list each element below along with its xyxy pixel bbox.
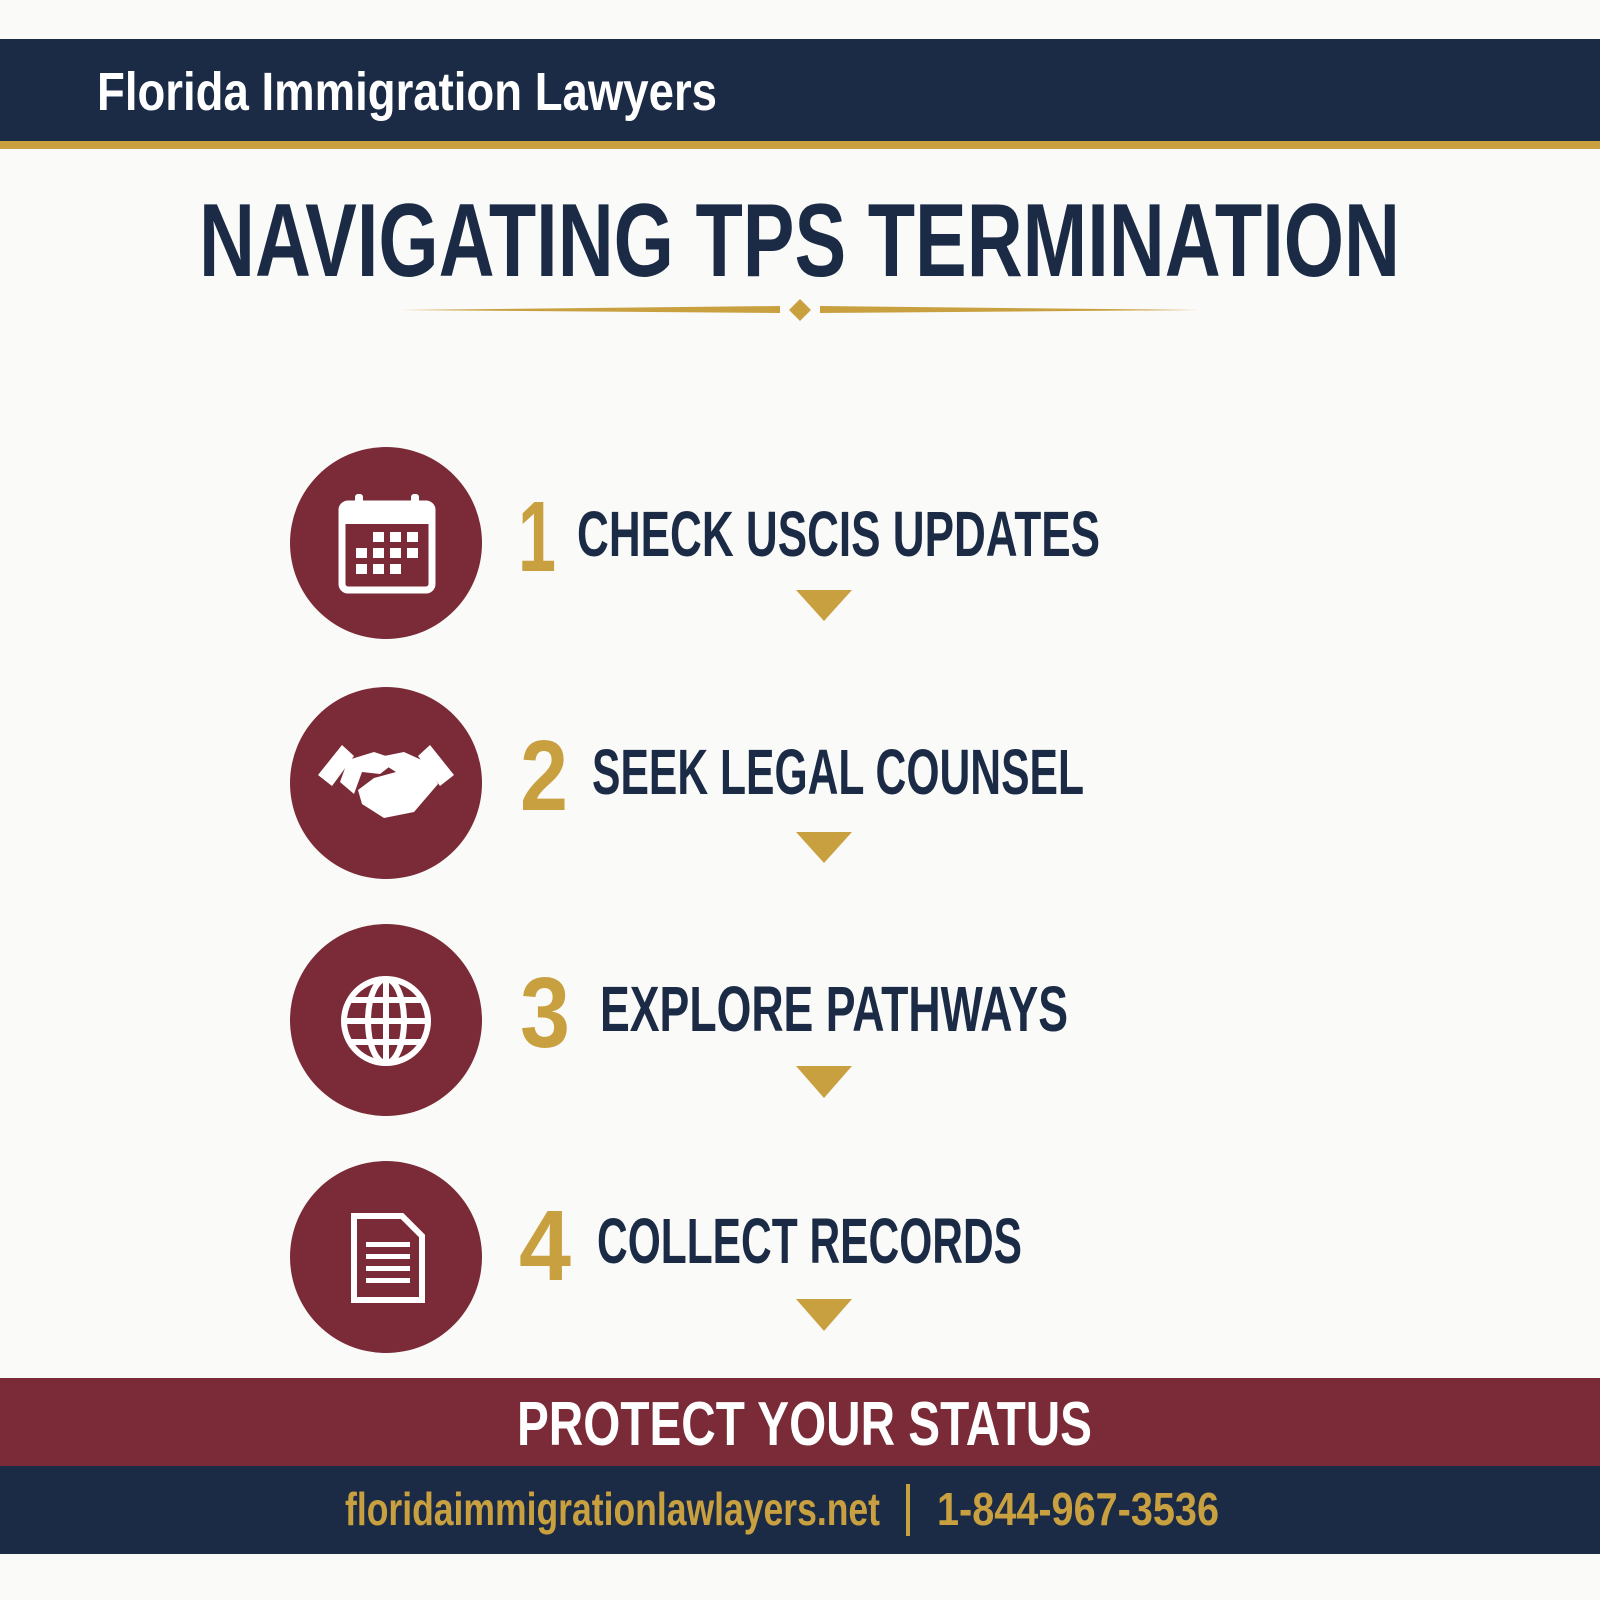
number 1: 1 — [518, 481, 556, 593]
icon: calendar — [290, 447, 482, 639]
step 2 — [290, 687, 1084, 879]
icon: document — [290, 1161, 482, 1353]
footer — [0, 1466, 1600, 1554]
step 3 label: EXPLORE PATHWAYS — [600, 973, 1068, 1045]
step 2 label: SEEK LEGAL COUNSEL — [592, 736, 1084, 808]
step 1 — [290, 447, 1100, 639]
step 4 — [290, 1161, 1022, 1353]
arrow — [796, 590, 852, 621]
step 1 label: CHECK USCIS UPDATES — [577, 498, 1100, 570]
number 2: 2 — [520, 720, 568, 832]
icon: handshake — [290, 687, 482, 879]
arrow — [796, 1299, 852, 1331]
number 3: 3 — [520, 957, 570, 1069]
arrow — [796, 832, 852, 863]
header text: Florida Immigration Lawyers — [97, 62, 717, 122]
arrow — [796, 1066, 852, 1098]
title divider — [400, 299, 1199, 321]
step 4 label: COLLECT RECORDS — [597, 1205, 1022, 1277]
header bar — [0, 39, 1600, 149]
banner: protect your status — [0, 1378, 1600, 1466]
number 4: 4 — [519, 1190, 571, 1302]
footer: floridaimmigrationlawlayers.net — [345, 1483, 880, 1535]
footer: 1-844-967-3536 — [937, 1483, 1219, 1535]
step 3 — [290, 924, 1068, 1116]
banner: protect your status: PROTECT YOUR STATUS — [517, 1390, 1092, 1459]
icon: globe — [290, 924, 482, 1116]
